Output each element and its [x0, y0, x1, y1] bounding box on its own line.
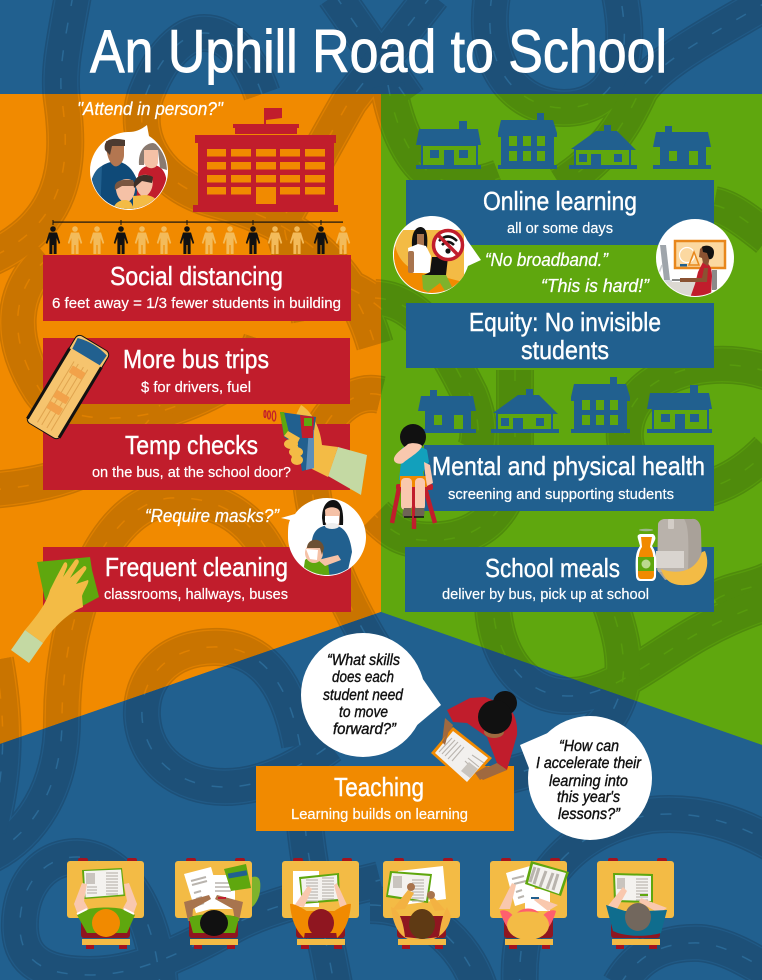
- icon: sad child on stool: [392, 424, 435, 529]
- panel: social distancing: 6 feet away = 1/3 fewer students in building: [52, 295, 341, 312]
- student desk 6: [597, 858, 674, 949]
- speech bubble: what skills: student need: [323, 687, 404, 704]
- speech bubble: how can I accelerate: “How can: [559, 738, 619, 755]
- panel: school meals: [405, 547, 714, 612]
- panel: more bus trips: [43, 338, 350, 404]
- speech bubble: what skills: “What skills: [327, 652, 400, 669]
- student desk 2: [175, 858, 260, 949]
- panel: online learning: [406, 180, 714, 245]
- panel: temp checks: on the bus, at the school door?: [92, 464, 291, 481]
- chart: row of people at six feet spacing: [46, 220, 350, 254]
- icon: hand holding thermometer gun: [264, 405, 367, 495]
- panel: online learning: Online learning: [483, 186, 637, 216]
- panel: teaching: [256, 766, 514, 831]
- icon: family speech bubble: [90, 125, 168, 215]
- icon: lunch bag, juice and banana: [636, 519, 707, 585]
- icon: hand wiping with green cloth: [11, 557, 99, 663]
- panel: more bus trips: More bus trips: [123, 344, 269, 374]
- panel: school meals: deliver by bus, pick up at school: [442, 586, 649, 603]
- panel: school meals: School meals: [485, 553, 620, 583]
- background: green panel: [381, 94, 762, 745]
- panel: teaching: Teaching: [334, 772, 424, 802]
- quote: attend in person: "Attend in person?": [77, 99, 225, 119]
- speech bubble: what skills: forward?”: [333, 721, 397, 738]
- speech bubble: how can I accelerate: this year's: [557, 789, 620, 806]
- panel: mental and physical health: [424, 445, 714, 511]
- panel: equity: Equity: No invisible: [469, 307, 661, 337]
- panel: temp checks: [43, 424, 350, 490]
- panel: teaching: Learning builds on learning: [291, 806, 468, 823]
- background: top band: [0, 0, 762, 94]
- icon: teacher and student wearing masks: [281, 498, 366, 580]
- student desk 3: [282, 858, 359, 949]
- speech bubble: how can I accelerate: I accelerate their: [536, 755, 642, 772]
- icon: school building: [193, 108, 338, 212]
- speech bubble: how can I accelerate: [520, 716, 652, 840]
- panel: more bus trips: $ for drivers, fuel: [141, 379, 251, 396]
- panel: equity: [406, 303, 714, 368]
- panel: frequent cleaning: classrooms, hallways, buses: [104, 586, 288, 603]
- panel: equity: students: [521, 335, 609, 365]
- icon: teacher at computer: [655, 219, 734, 300]
- speech bubble: what skills: [301, 633, 441, 757]
- panel: social distancing: [43, 255, 351, 321]
- quote: require masks: “Require masks?”: [145, 506, 280, 526]
- icons: houses bottom row: [418, 377, 712, 433]
- panel: mental and physical health: screening and supporting students: [448, 486, 674, 503]
- panel: frequent cleaning: Frequent cleaning: [105, 552, 288, 582]
- icon: teacher from above with open book: [431, 691, 517, 785]
- student desk 4: [383, 858, 460, 949]
- speech bubble: what skills: does each: [332, 669, 394, 686]
- icons: houses top row: [416, 113, 711, 169]
- speech bubble: how can I accelerate: learning into: [549, 773, 628, 790]
- quote: this is hard: “This is hard!”: [541, 276, 650, 296]
- background: blue teaching panel: [0, 612, 762, 980]
- title: An Uphill Road to School: [90, 18, 667, 85]
- icon: student without broadband: [393, 216, 481, 296]
- panel: social distancing: Social distancing: [110, 261, 283, 291]
- quote: no broadband: “No broadband.”: [485, 250, 609, 270]
- speech bubble: how can I accelerate: lessons?”: [558, 806, 621, 823]
- panel: mental and physical health: Mental and physical health: [432, 451, 705, 481]
- icon: school bus from above: [25, 333, 111, 441]
- student desk 5: [490, 858, 569, 949]
- speech bubble: what skills: to move: [339, 704, 388, 721]
- panel: online learning: all or some days: [507, 220, 613, 237]
- panel: frequent cleaning: [43, 547, 351, 612]
- background: orange panel: [0, 94, 381, 744]
- student desk 1: [67, 858, 144, 949]
- panel: temp checks: Temp checks: [125, 430, 258, 460]
